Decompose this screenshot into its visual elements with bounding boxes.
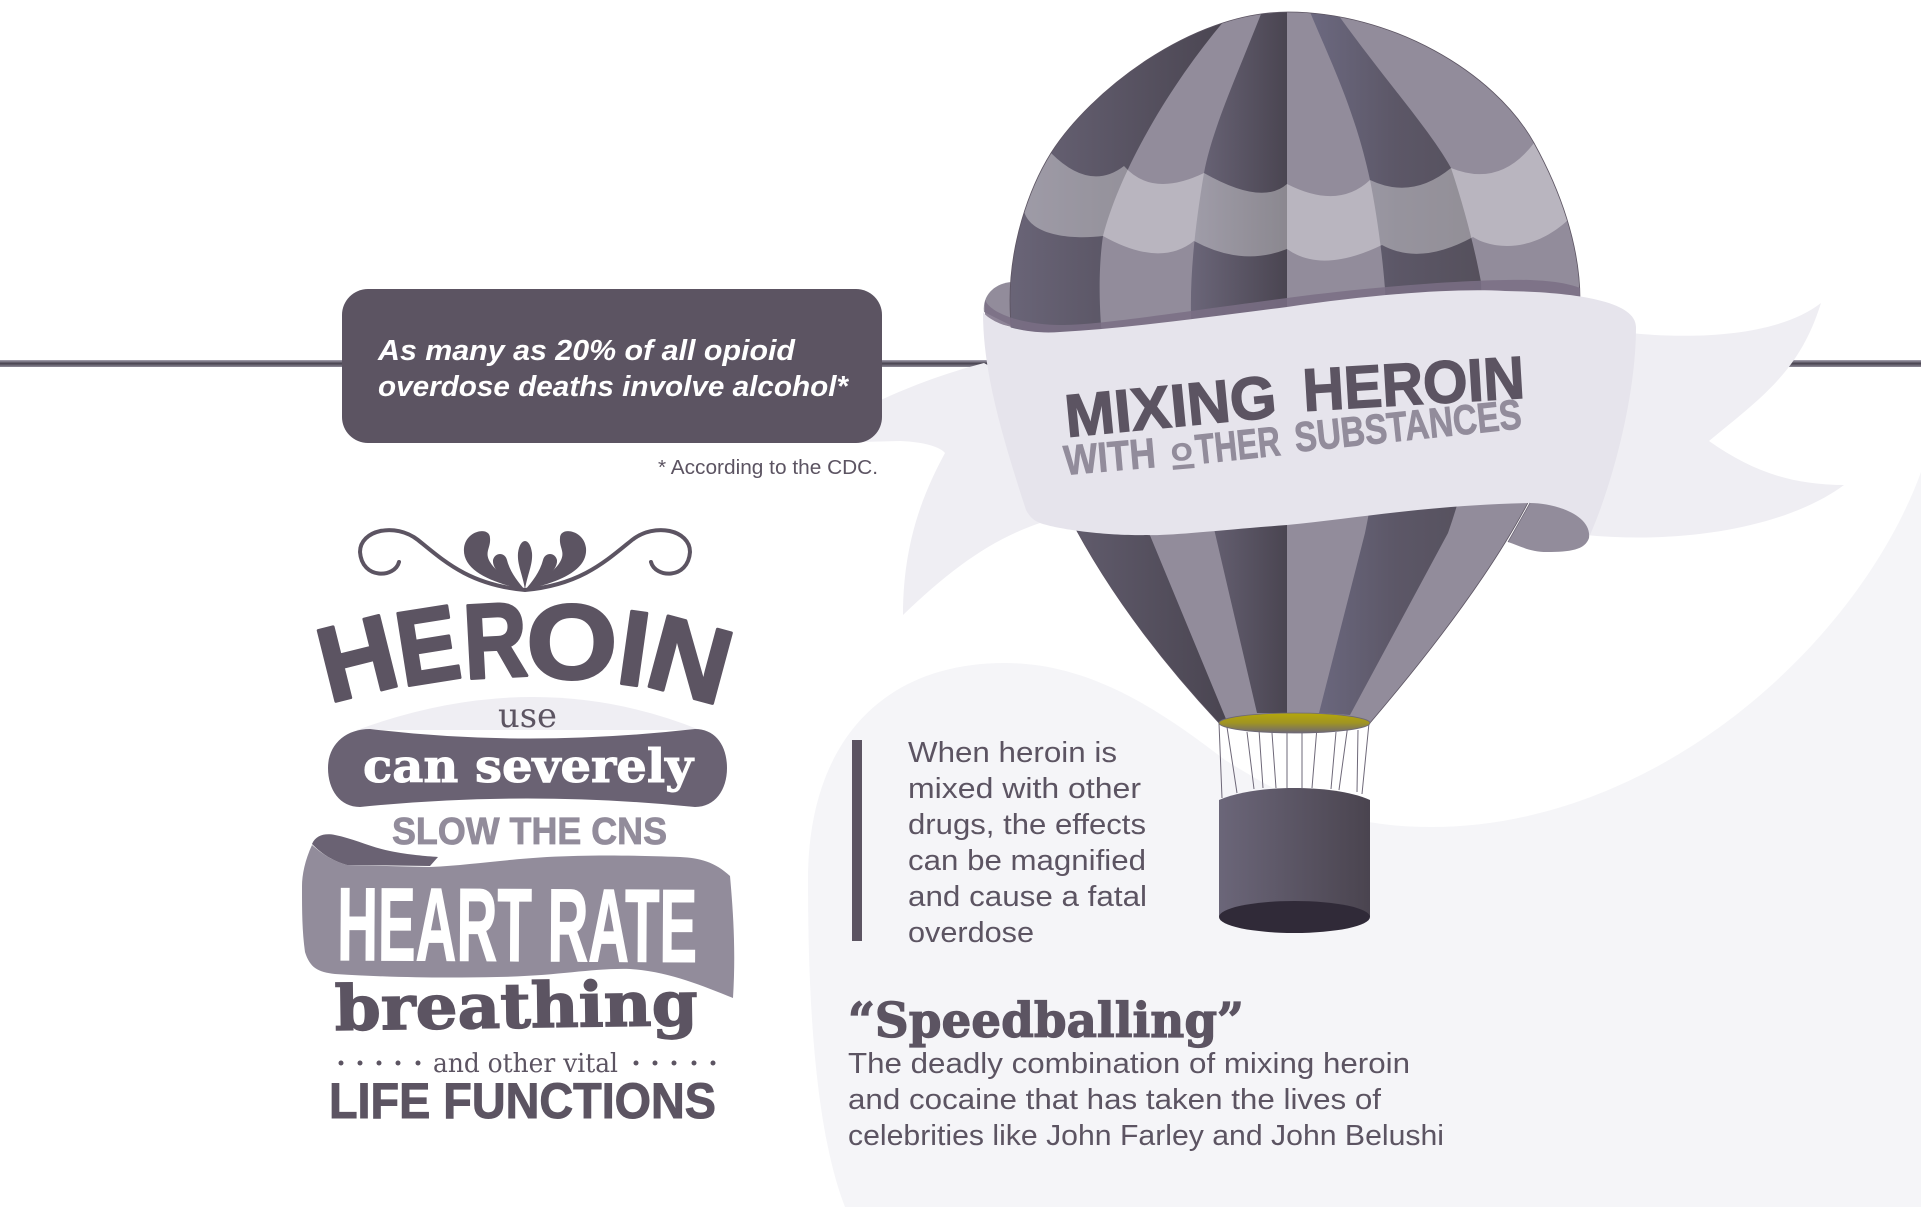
heading: HEROIN: O: [526, 582, 617, 701]
hot air balloon: [1000, 0, 1600, 933]
text block: speedballing description: [848, 1048, 1444, 1152]
ribbon back fold left: [984, 282, 1020, 330]
callout: alcohol statistic: overdose deaths involve alcohol*: [378, 371, 850, 403]
heading: HEROIN: I: [611, 588, 657, 709]
ribbon title: O: [1170, 438, 1193, 467]
heading: HEROIN: E: [388, 583, 467, 710]
ropes: [1219, 715, 1369, 798]
ribbon title: [1062, 344, 1526, 484]
ribbon shadow strip: [985, 280, 1580, 340]
scalloped band: [1000, 143, 1590, 261]
text: and other vital with dots: and other vital: [433, 1049, 618, 1079]
text block: speedballing description: and cocaine that has taken the lives of: [848, 1084, 1382, 1116]
pill: can severely: [328, 729, 727, 807]
text block: drug effects: mixed with other: [908, 773, 1141, 805]
basket: [1219, 788, 1370, 933]
text block: speedballing description: The deadly combination of mixing heroin: [848, 1048, 1410, 1080]
text block: drug effects: When heroin is: [908, 737, 1117, 769]
text: use: use: [498, 696, 557, 736]
balloon outline: [1010, 12, 1580, 723]
arc behind use: [357, 697, 700, 730]
ribbon title: HEROIN: [1301, 344, 1526, 424]
callout: alcohol statistic: [342, 289, 882, 443]
text block: drug effects: overdose: [908, 917, 1034, 949]
text: slow the cns: SLOW THE CNS: [392, 811, 667, 853]
horizontal rule: [0, 360, 1921, 367]
heading: HEROIN: R: [460, 580, 530, 702]
heading: HEROIN: H: [306, 592, 409, 725]
accent bar: [852, 740, 862, 941]
callout: alcohol statistic: As many as 20% of all opioid: [377, 335, 796, 367]
background blob: [808, 472, 1921, 1207]
text block: drug effects: [908, 737, 1147, 949]
ribbon title: SUBSTANCES: [1292, 390, 1524, 461]
text: and other vital with dots: [338, 1049, 716, 1079]
fold seam line: [1508, 503, 1530, 542]
banner: heart rate: [302, 834, 734, 998]
balloon envelope: [1000, 0, 1600, 730]
heading: HEROIN: N: [636, 593, 744, 728]
ribbon tail right: [1585, 303, 1844, 538]
pill: can severely: can severely: [363, 739, 694, 793]
ribbon tail left: [860, 363, 1050, 615]
ribbon title: WITH: [1062, 429, 1157, 484]
text: breathing: breathing: [334, 967, 698, 1045]
ribbon front fold right: [1508, 503, 1589, 552]
footnote: * According to the CDC.: [658, 457, 878, 479]
banner: heart rate: HEART RATE: [337, 867, 697, 985]
ribbon title: MIXING: [1062, 363, 1279, 450]
text block: drug effects: drugs, the effects: [908, 809, 1146, 841]
text: life functions: LIFE FUNCTIONS: [329, 1073, 716, 1129]
heading: speedballing: “Speedballing”: [848, 993, 1244, 1049]
ribbon title: THER: [1193, 417, 1282, 473]
main ribbon: [983, 290, 1636, 535]
text block: drug effects: can be magnified: [908, 845, 1146, 877]
burner opening: [1219, 713, 1370, 733]
text block: speedballing description: celebrities like John Farley and John Belushi: [848, 1120, 1444, 1152]
ornament: [360, 530, 690, 590]
heading: HEROIN: [306, 580, 744, 728]
text block: drug effects: and cause a fatal: [908, 881, 1147, 913]
